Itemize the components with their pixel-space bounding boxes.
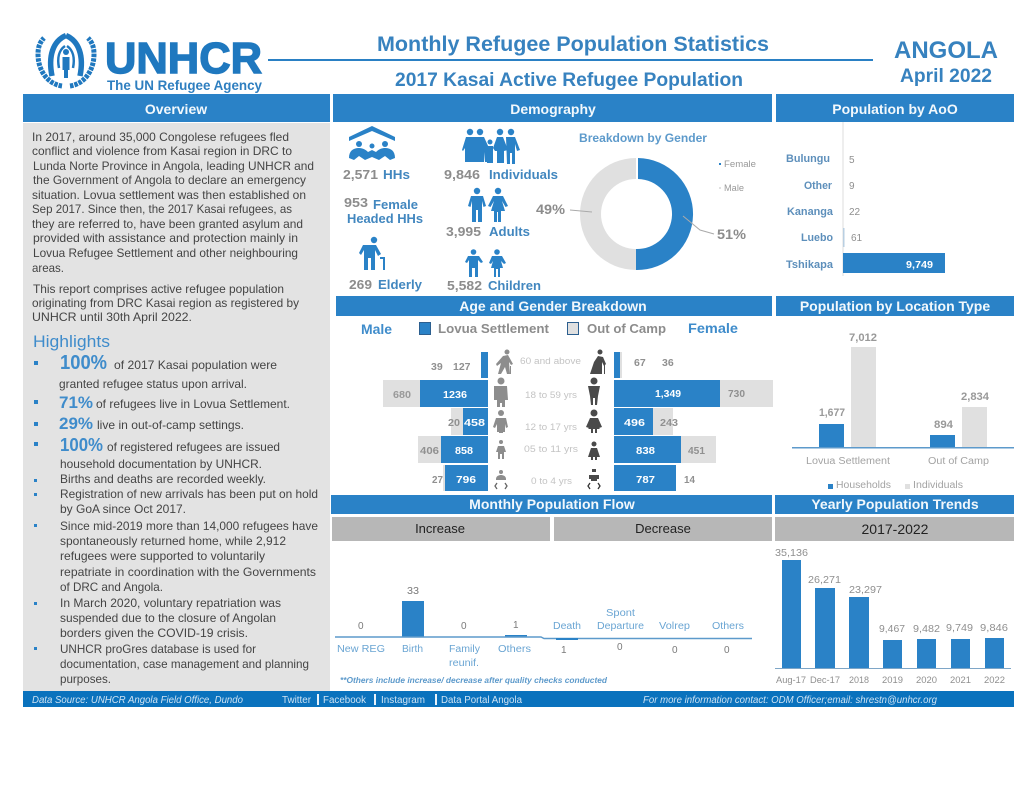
- age group labels: 12 to 17 yrs: [525, 422, 578, 432]
- text block: overview paragraph: the Government of Angola to declare an emergency: [33, 174, 306, 187]
- bar chart: female: 1,349: [655, 388, 681, 400]
- bar chart: yearly: [775, 547, 1011, 686]
- heading: yearly trends: Yearly Population Trends: [811, 496, 979, 512]
- subheading: increase: [332, 517, 550, 541]
- panel: yearly population trends: [775, 495, 1014, 686]
- bar chart: AoO: Other: [804, 180, 833, 192]
- legend: male female location: Male: [361, 321, 392, 337]
- icon: children: [465, 249, 506, 277]
- donut chart: gender: [536, 158, 747, 270]
- bar chart: female: 14: [684, 474, 695, 486]
- bar chart: yearly: Dec-17: [810, 675, 840, 686]
- bar chart: AoO: 9,749: [906, 259, 933, 271]
- heading: monthly flow: Monthly Population Flow: [469, 496, 635, 512]
- bar chart: yearly: 9,482: [913, 623, 940, 635]
- list: highlights: live in out-of-camp settings.: [97, 419, 244, 432]
- bar chart: male: 27: [432, 474, 443, 486]
- heading: overview: [23, 94, 330, 122]
- panel: demography: [333, 94, 772, 293]
- bar chart: location type: 7,012: [849, 332, 877, 344]
- text block: report scope: This report comprises active refugee population: [33, 283, 284, 296]
- heading: age and gender: Age and Gender Breakdown: [459, 298, 647, 314]
- bar chart: decrease: Departure: [597, 621, 644, 632]
- bar chart: yearly: 26,271: [808, 574, 841, 586]
- bar chart: decrease: 0: [672, 645, 678, 656]
- list: highlights: household documentation by UNHCR.: [60, 458, 262, 471]
- social links: Instagram: [381, 695, 425, 706]
- list: highlights: Births and deaths are recorded weekly.: [60, 473, 266, 486]
- bar chart: male: 796: [456, 474, 476, 486]
- bar chart: yearly: 9,749: [946, 622, 973, 634]
- bar chart: male: 20: [448, 417, 460, 429]
- text block: overview paragraph: [32, 131, 314, 275]
- list: highlights: spontaneously returned home, while 2,912: [60, 535, 286, 548]
- bar chart: location type: Out of Camp: [928, 456, 989, 467]
- stat: adults: 3,995: [446, 224, 481, 239]
- subheading: decrease: Decrease: [635, 521, 691, 536]
- panel: age and gender breakdown: [336, 296, 773, 491]
- bar chart: increase: Family: [449, 644, 480, 655]
- bar chart: female: 243: [660, 417, 678, 429]
- stat: children: Children: [488, 278, 541, 293]
- contact: For more information contact: ODM Officer;email: shrestn@unhcr.org: [643, 695, 937, 706]
- list: highlights: of DRC and Angola.: [60, 581, 163, 594]
- list: highlights: Since mid-2019 more than 14,000 refugees have: [60, 520, 318, 533]
- icon: UNHCR emblem: [38, 36, 94, 86]
- bar chart: decrease: Others: [712, 621, 744, 632]
- list: highlights: of registered refugees are issued: [107, 441, 280, 454]
- list: highlights: of 2017 Kasai population were: [114, 359, 277, 372]
- bar chart: AoO: Luebo: [801, 232, 833, 244]
- legend: location type: Households: [836, 480, 891, 491]
- stat: elderly: Elderly: [378, 277, 423, 292]
- bar chart: increase: 0: [461, 621, 467, 632]
- bar chart: increase: 33: [407, 586, 419, 597]
- heading: breakdown by gender: Breakdown by Gender: [579, 133, 708, 145]
- bar chart: AoO: Tshikapa: [786, 259, 834, 271]
- country and date: [894, 37, 998, 87]
- heading: highlights: Highlights: [33, 332, 110, 351]
- bar chart: yearly: 2018: [849, 675, 869, 686]
- text block: report scope: [32, 283, 299, 324]
- heading: overview: Overview: [145, 101, 207, 117]
- data source: Data Source: UNHCR Angola Field Office, Dundo: [32, 695, 243, 706]
- stat: elderly: 269: [349, 277, 372, 292]
- bar chart: AoO: 5: [849, 155, 855, 166]
- bar chart: location type: Lovua Settlement: [806, 456, 890, 467]
- donut chart: gender: 51%: [717, 226, 747, 242]
- title: Monthly Refugee Population Statistics: [377, 33, 769, 56]
- text block: overview paragraph: provided with assistance and protection mainly in: [33, 232, 298, 245]
- list: highlights: 29%: [59, 414, 93, 433]
- bar chart: increase: reunif.: [449, 658, 479, 669]
- logo: UNHCR: [38, 34, 262, 93]
- bar chart: yearly: Aug-17: [776, 675, 806, 686]
- bar chart: increase: [335, 586, 752, 669]
- text block: overview paragraph: conflict and violence from Kasai region in DRC to: [32, 145, 292, 158]
- bar chart: decrease: Death: [553, 621, 581, 632]
- bar chart: male: [383, 352, 488, 491]
- text block: report scope: UNHCR until 30th April 2022.: [32, 311, 192, 324]
- bar chart: location type: 894: [934, 419, 954, 431]
- list: highlights: documentation, case management and planning: [60, 658, 309, 671]
- social links: Data Portal Angola: [441, 695, 522, 706]
- icons: male age groups: [493, 350, 513, 489]
- icon: adults: [468, 188, 508, 222]
- list: highlights: 71%: [59, 393, 93, 412]
- bar chart: decrease: Spont: [606, 608, 635, 619]
- age group labels: [520, 356, 581, 486]
- bar chart: location type: 2,834: [961, 391, 990, 403]
- text block: overview paragraph: Sep 2017. Since then, the 2017 Kasai refugees, as: [32, 203, 292, 216]
- list: highlights: Registration of new arrivals has been put on hold: [60, 488, 318, 501]
- bar chart: decrease: 0: [617, 642, 623, 653]
- bar chart: male: 39: [431, 361, 443, 373]
- stat: female headed households: Female: [373, 197, 418, 212]
- list: highlights: suspended due to the closure of Angolan: [60, 612, 276, 625]
- list: highlights: purposes.: [60, 673, 111, 686]
- subheading: years: 2017-2022: [862, 521, 929, 537]
- age group labels: 60 and above: [520, 356, 581, 366]
- bar chart: female: 67: [634, 357, 646, 369]
- bar chart: increase: Birth: [402, 644, 423, 655]
- heading: location type: [776, 296, 1014, 316]
- list: highlights: [34, 352, 318, 686]
- stat: households: 2,571: [343, 167, 378, 182]
- list: highlights: granted refugee status upon arrival.: [59, 378, 247, 391]
- bar chart: AoO: 61: [851, 233, 863, 244]
- bar chart: decrease: Volrep: [659, 621, 690, 632]
- social links: [282, 694, 522, 706]
- list: highlights: refugees were supported to voluntarily: [60, 550, 265, 563]
- legend: location type: [828, 480, 963, 491]
- heading: age and gender: [336, 296, 772, 316]
- list: highlights: by GoA since Oct 2017.: [60, 503, 186, 516]
- stat: adults: Adults: [489, 224, 530, 239]
- panel: population by location type: [776, 296, 1014, 491]
- bar chart: male: 858: [455, 445, 473, 457]
- legend: male female location: Female: [688, 320, 738, 336]
- bar chart: increase: 1: [513, 620, 519, 631]
- panel: population by AoO: [776, 94, 1014, 276]
- text block: overview paragraph: areas.: [32, 262, 64, 275]
- legend: gender: Male: [724, 183, 744, 193]
- bar chart: decrease: 0: [724, 645, 730, 656]
- bar chart: female: 36: [662, 357, 674, 369]
- subheading: increase: Increase: [415, 521, 465, 536]
- list: highlights: repatriate in coordination with the Governments: [60, 566, 316, 579]
- bar chart: increase: 0: [358, 621, 364, 632]
- subheading: decrease: [554, 517, 772, 541]
- donut chart: gender: 49%: [536, 201, 566, 217]
- list: highlights: In March 2020, voluntary repatriation was: [60, 597, 281, 610]
- list: highlights: of refugees live in Lovua Settlement.: [96, 398, 290, 411]
- bar chart: location type: 1,677: [819, 407, 845, 419]
- country and date: ANGOLA: [894, 37, 998, 64]
- stat: elderly: [349, 277, 423, 292]
- bar chart: yearly: 35,136: [775, 547, 808, 559]
- age group labels: 0 to 4 yrs: [531, 476, 573, 486]
- stat: female headed households: Headed HHs: [347, 211, 423, 226]
- heading: location type: Population by Location Type: [800, 298, 990, 314]
- legend: male female location: Lovua Settlement: [438, 321, 550, 336]
- subheading: years: [775, 517, 1014, 541]
- bar chart: AoO: 9: [849, 181, 855, 192]
- panel: monthly population flow: [331, 495, 772, 685]
- bar chart: female: 730: [728, 388, 745, 400]
- bar chart: AoO: Bulungu: [786, 153, 830, 165]
- legend: gender: Female: [724, 159, 756, 169]
- panel: overview: [23, 94, 330, 691]
- age group labels: 18 to 59 yrs: [525, 390, 578, 400]
- heading: population by AoO: [776, 94, 1014, 122]
- text block: overview paragraph: situation. Lovua settlement was then established on: [32, 189, 306, 202]
- legend: gender: [719, 159, 756, 193]
- bar chart: female: [614, 352, 773, 491]
- bar chart: female: 451: [688, 445, 705, 457]
- heading: monthly flow: [331, 495, 772, 514]
- heading: yearly trends: [775, 495, 1014, 514]
- icons: female age groups: [586, 350, 606, 489]
- social links: Twitter: [282, 695, 312, 706]
- bar chart: decrease: [553, 608, 744, 656]
- bar chart: AoO: Kananga: [787, 206, 834, 218]
- text block: report scope: originating from DRC Kasai region as registered by: [32, 297, 299, 310]
- bar chart: yearly: 2019: [882, 675, 903, 686]
- stat: female headed households: [344, 195, 423, 226]
- stat: adults: [446, 224, 530, 239]
- heading: demography: [333, 94, 772, 122]
- stat: individuals: 9,846: [444, 167, 480, 182]
- bar chart: increase: New REG: [337, 644, 385, 655]
- text block: overview paragraph: In 2017, around 35,000 Congolese refugees fled: [32, 131, 289, 144]
- stat: households: HHs: [383, 167, 410, 182]
- stat: individuals: [444, 167, 558, 182]
- bar chart: decrease: 1: [561, 645, 567, 656]
- bar chart: yearly: 2020: [916, 675, 937, 686]
- bar chart: increase: Others: [498, 644, 531, 655]
- heading: population by AoO: Population by AoO: [832, 101, 958, 117]
- bar chart: male: 1236: [443, 389, 467, 401]
- bar chart: female: 787: [636, 474, 655, 486]
- country and date: April 2022: [900, 66, 992, 87]
- bar chart: AoO: 22: [849, 207, 861, 218]
- stat: female headed households: 953: [344, 195, 368, 210]
- bar chart: male: 458: [464, 417, 485, 429]
- social links: Facebook: [323, 695, 367, 706]
- list: highlights: borders given the COVID-19 crisis.: [60, 627, 248, 640]
- age group labels: 05 to 11 yrs: [524, 444, 579, 454]
- stat: children: [447, 278, 541, 293]
- icon: household: [349, 126, 395, 160]
- stat: households: [343, 167, 410, 182]
- bar chart: female: 838: [636, 445, 655, 457]
- heading: demography: Demography: [510, 101, 596, 117]
- bar chart: male: 406: [420, 445, 439, 457]
- logo wordmark: UNHCR: [105, 34, 262, 83]
- legend: location type: Individuals: [913, 480, 963, 491]
- stat: individuals: Individuals: [489, 167, 558, 182]
- legend: male female location: Out of Camp: [587, 321, 666, 336]
- footnote: **Others include increase/ decrease after quality checks conducted: [340, 676, 608, 685]
- text block: overview paragraph: Lunda Norte Province in Angola, leading UNHCR and: [33, 160, 314, 173]
- logo tagline: The UN Refugee Agency: [107, 77, 262, 93]
- icon: elderly: [359, 237, 385, 270]
- stat: children: 5,582: [447, 278, 482, 293]
- bar chart: female: 496: [624, 417, 645, 429]
- subtitle: 2017 Kasai Active Refugee Population: [395, 70, 743, 91]
- footer bar: [23, 691, 1014, 707]
- list: highlights: UNHCR proGres database is used for: [60, 643, 256, 656]
- list: highlights: 100%: [60, 435, 103, 455]
- bar chart: yearly: 9,846: [980, 622, 1008, 634]
- legend: male female location: [361, 320, 738, 337]
- bar chart: yearly: 23,297: [849, 584, 882, 596]
- icon: family: [462, 129, 520, 164]
- bar chart: yearly: 9,467: [879, 623, 905, 635]
- bar chart: yearly: 2022: [984, 675, 1005, 686]
- bar chart: yearly: 2021: [950, 675, 971, 686]
- text block: overview paragraph: Lovua Refugee Settlement and other neighbouring: [33, 247, 298, 260]
- bar chart: male: 127: [453, 361, 471, 373]
- text block: overview paragraph: they are referred to, have been granted asylum and: [32, 218, 303, 231]
- list: highlights: 100%: [60, 352, 107, 374]
- bar chart: location type: [792, 332, 1014, 467]
- bar chart: male: 680: [393, 389, 411, 401]
- bar chart: AoO: [786, 122, 945, 276]
